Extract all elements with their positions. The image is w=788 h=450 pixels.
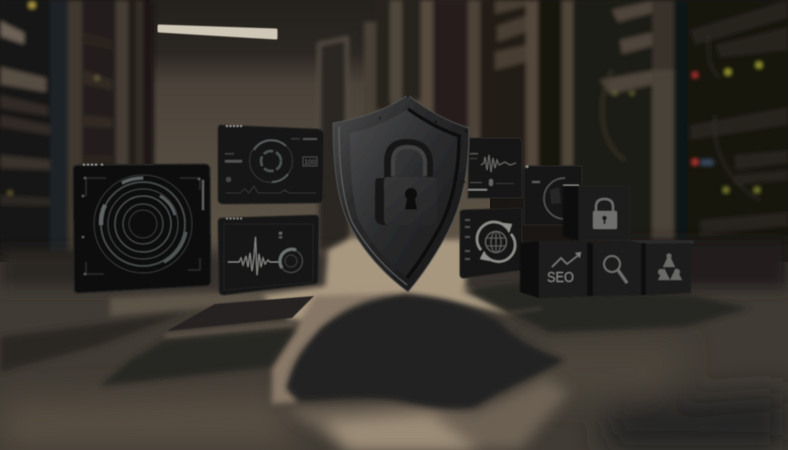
icon: magnifier [604,256,627,283]
icon: globe with refresh arrows [477,222,515,262]
panel: waveform screen [218,215,319,295]
shield rim [333,95,469,292]
panel: refresh globe screen [460,208,522,278]
cube stack [520,185,694,298]
bottom centre light [285,378,570,450]
icon: padlock [375,143,437,225]
lit seam between shadows [165,321,297,339]
cube: team pyramid [628,240,694,295]
cube: lock [563,185,630,241]
lit strip under the panels [110,290,328,316]
icon: SEO trend line [552,254,580,267]
corridor far racks [319,0,575,250]
panel: large radar screen [73,163,211,293]
shield dark inner band [407,109,459,278]
cube: magnifier [587,242,641,296]
shield with padlock [333,95,469,292]
panel: rear ring gauge screen [524,165,582,225]
icon: pyramid of people [658,254,682,280]
keyhole [405,188,417,210]
panel: dashboard screen with ring gauge: 100 [304,160,316,166]
left server rack [0,0,154,252]
right server rack [575,0,788,252]
icon: lock glyph [593,199,617,229]
ceiling light [159,26,276,38]
dark floor shadows [0,313,185,372]
SEO label: SEO [547,269,574,286]
shield inner face [350,109,459,278]
light beam down between shadows [272,293,400,404]
floor with light beams and shadows [0,238,788,450]
central light patch behind shield [262,238,512,322]
panel: rear waveform screen [468,138,522,198]
floor base [0,262,788,450]
floor light pools [0,345,788,450]
panel: dashboard screen with ring gauge [218,125,324,204]
cube: SEO [520,241,587,298]
